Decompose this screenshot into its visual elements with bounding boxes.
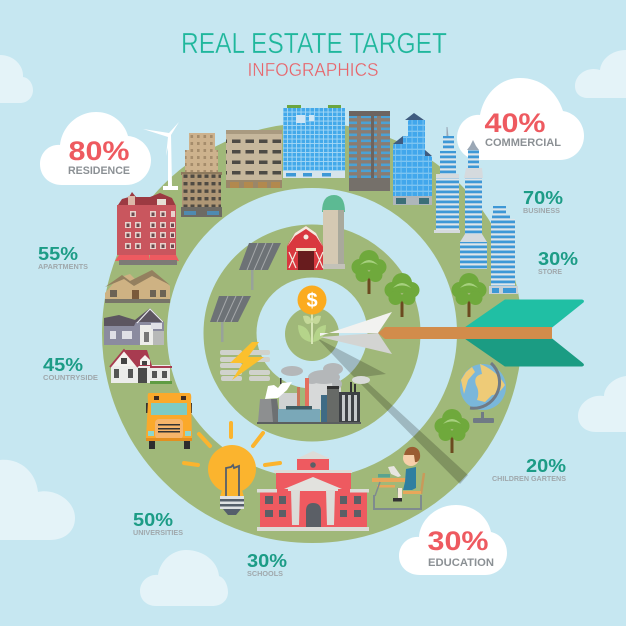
icon: tree upper xyxy=(352,250,386,294)
stat: store xyxy=(538,248,578,276)
icon: school bus xyxy=(146,393,192,449)
icon: red barn xyxy=(287,226,323,270)
cloud callout: education: EDUCATION xyxy=(428,557,494,569)
stat: countryside xyxy=(43,354,98,382)
stat: business: BUSINESS xyxy=(523,206,560,215)
target rings xyxy=(134,156,490,510)
cloud callout: commercial xyxy=(457,78,584,160)
house: tan bungalow xyxy=(105,270,170,303)
stat: store: 30% xyxy=(538,248,578,269)
cloud callout: residence: RESIDENCE xyxy=(68,165,130,177)
building: skyscraper two xyxy=(460,140,487,269)
building: tan office block xyxy=(226,130,282,188)
building: red apartments xyxy=(115,192,179,265)
stat: universities: UNIVERSITIES xyxy=(133,528,183,537)
cloud callout: commercial: COMMERCIAL xyxy=(485,137,561,149)
figure: student at desk xyxy=(372,447,424,509)
stat: business: 70% xyxy=(523,187,563,208)
icon: tree on outer ring xyxy=(452,273,486,317)
subtitle: INFOGRAPHICS xyxy=(248,60,378,80)
building: tan tower xyxy=(181,133,222,217)
icon: dollar plant xyxy=(298,286,326,344)
cloud callout: commercial: 40% xyxy=(484,108,546,138)
arrow shadow xyxy=(317,338,468,484)
stat: schools: 30% xyxy=(247,550,287,571)
title: REAL ESTATE TARGET xyxy=(181,28,447,60)
icon: dollar plant: $ xyxy=(306,290,318,312)
stat: universities xyxy=(133,509,183,537)
icon: silo xyxy=(322,195,345,269)
stat: children gartens xyxy=(492,455,566,483)
stat: children gartens: 20% xyxy=(526,455,566,476)
icon: wind turbine xyxy=(143,122,179,190)
stat: countryside: COUNTRYSIDE xyxy=(43,373,98,382)
stat: apartments xyxy=(38,243,88,271)
stat: business xyxy=(523,187,563,215)
stat: apartments: APARTMENTS xyxy=(38,262,88,271)
building: blue tower xyxy=(393,113,432,205)
cloud callout: residence xyxy=(40,112,151,185)
stat: store: STORE xyxy=(538,267,562,276)
building: stepped tower xyxy=(489,206,518,294)
stat: apartments: 55% xyxy=(38,243,78,264)
stat: schools xyxy=(247,550,287,578)
building: skyscraper one xyxy=(434,127,460,233)
building: grey brown tower xyxy=(349,111,390,191)
cloud callout: education xyxy=(399,505,507,575)
house: grey house xyxy=(104,308,164,345)
arrow xyxy=(320,300,584,366)
stat: countryside: 45% xyxy=(43,354,83,375)
stat: universities: 50% xyxy=(133,509,173,530)
icon: globe xyxy=(460,363,506,423)
icon: tree by globe xyxy=(434,409,470,453)
stat: children gartens: CHILDREN GARTENS xyxy=(492,474,566,483)
icon: solar panel lower xyxy=(210,296,251,342)
cloud callout: residence: 80% xyxy=(68,136,130,166)
building: blue glass block xyxy=(283,105,345,178)
icon: energy stack with bolt xyxy=(220,342,270,381)
icon: light bulb xyxy=(184,423,280,515)
icon: factory xyxy=(257,363,370,424)
icon: tree near center xyxy=(384,273,420,317)
building: school xyxy=(257,451,369,531)
cloud callout: education: 30% xyxy=(428,526,488,556)
icon: solar panel upper xyxy=(239,243,281,290)
stat: schools: SCHOOLS xyxy=(247,569,283,578)
house: white house xyxy=(110,350,172,384)
